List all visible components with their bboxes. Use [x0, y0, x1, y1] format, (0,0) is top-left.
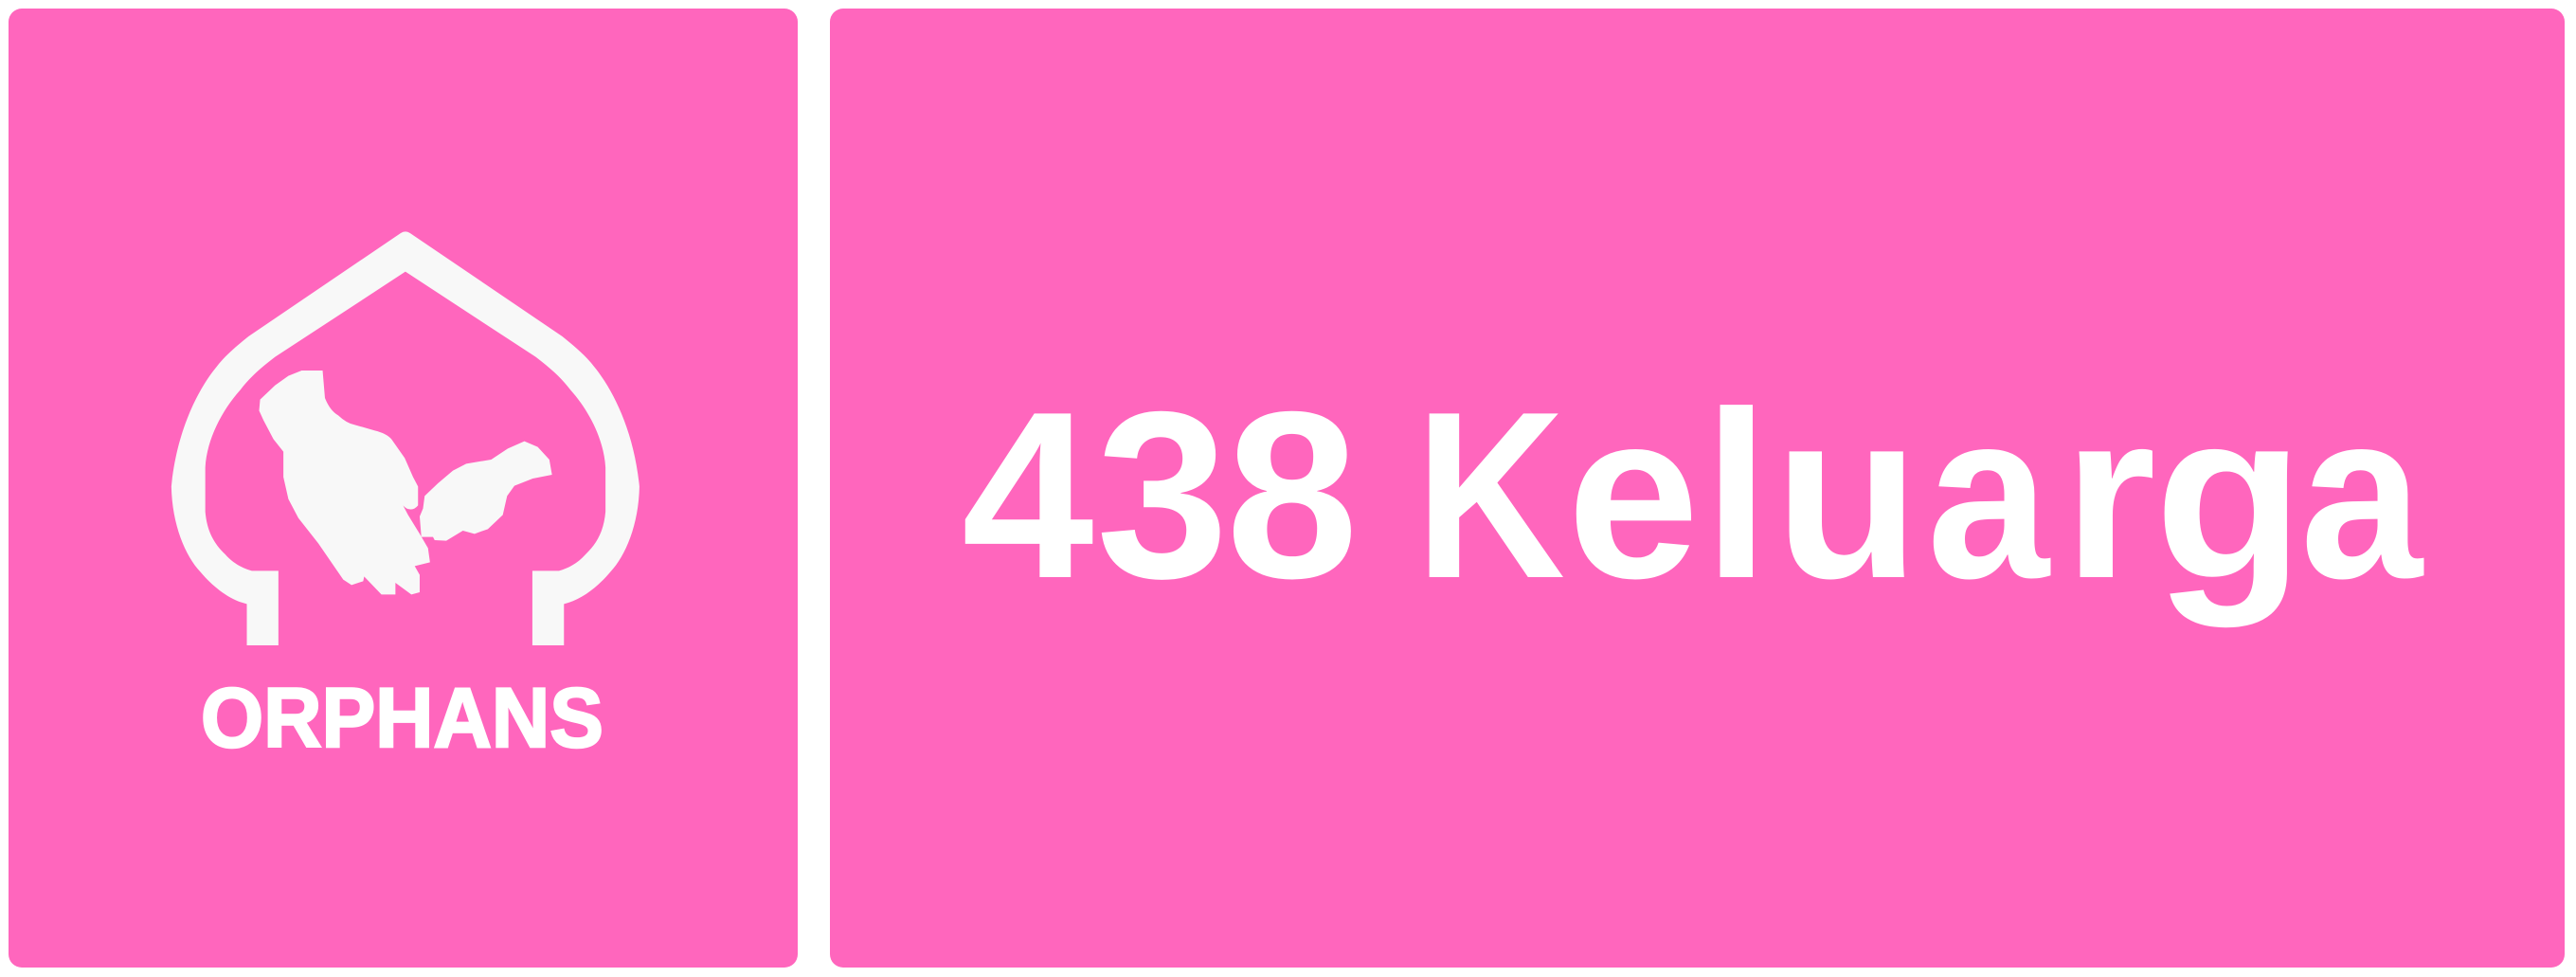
icon: large hand: [260, 371, 430, 594]
headline value: 3: [1096, 363, 1229, 628]
headline value: e: [1567, 363, 1700, 628]
logo wordmark: ORPHANS: [201, 670, 603, 765]
headline value: u: [1774, 363, 1919, 628]
headline value: a: [2300, 363, 2424, 628]
headline value: 4: [962, 363, 1094, 628]
headline value: g: [2154, 363, 2304, 628]
icon: house with caring hands: [171, 231, 639, 645]
panel: orphans logo: [9, 9, 798, 968]
headline value: K: [1415, 363, 1565, 628]
panel: family count: [830, 9, 2565, 968]
headline value: r: [2063, 363, 2156, 628]
icon: dome house outline: [171, 231, 639, 645]
icon: small hand: [420, 442, 552, 541]
headline value: l: [1703, 363, 1770, 628]
panel background: right: [830, 9, 2565, 968]
panel background: left: [9, 9, 798, 968]
headline value: a: [1927, 363, 2051, 628]
headline value: 8: [1226, 363, 1359, 628]
